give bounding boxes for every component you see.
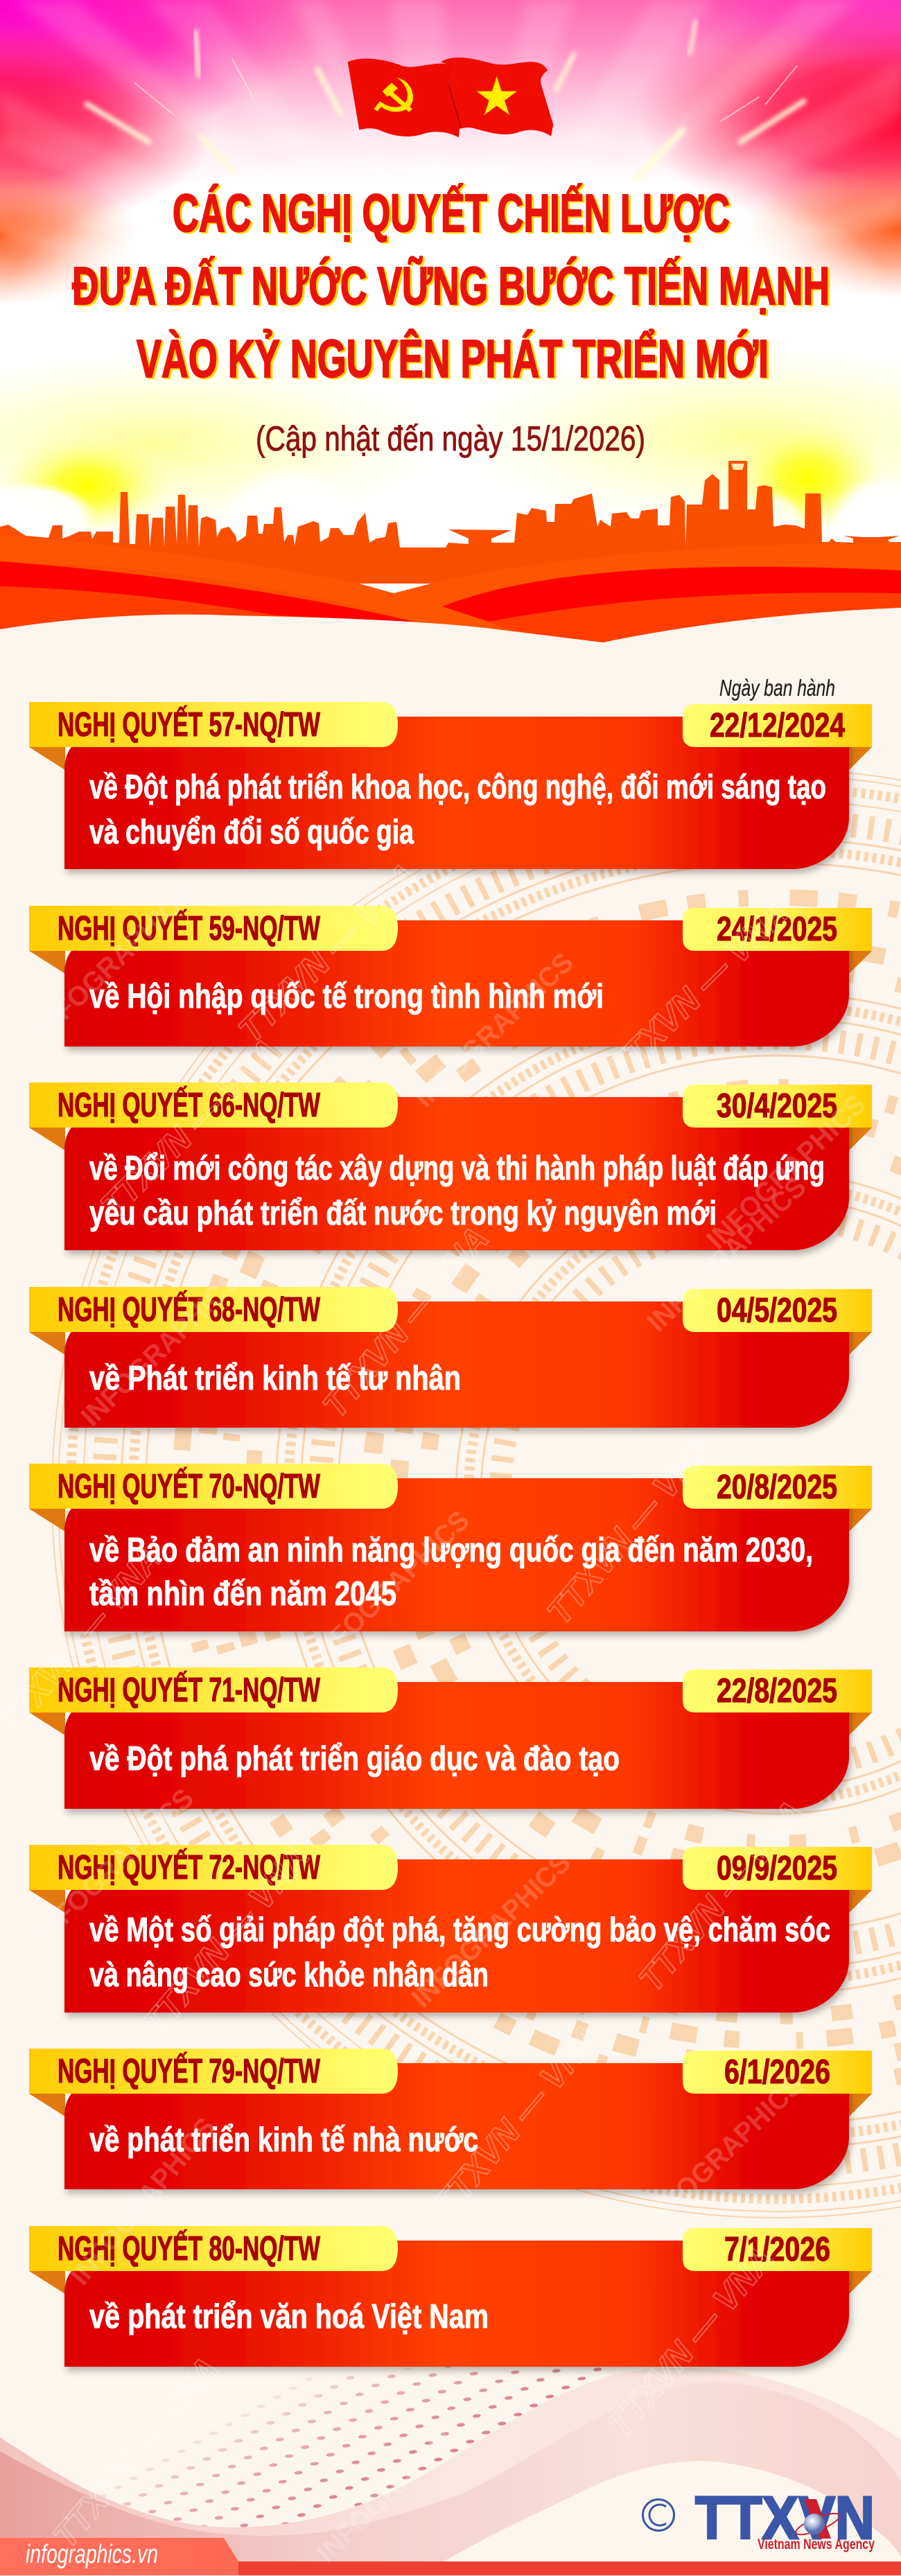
resolution 79: 6/1/2026 — [724, 2053, 830, 2091]
diagonal watermarks: TTXVN — VNA — [540, 1426, 721, 1631]
title — [72, 183, 830, 389]
diagonal watermarks: INFOGRAPHICS — [64, 2112, 222, 2291]
subtitle: update date: (Cập nhật đến ngày 15/1/2026) — [256, 419, 645, 458]
resolution 80 — [29, 2226, 872, 2367]
resolution 71 — [29, 1667, 872, 1809]
diagonal watermarks: TTXVN — VNA — [46, 2350, 227, 2555]
resolution 72 — [29, 1845, 872, 2013]
icon: party and national flags — [348, 58, 553, 137]
resolution 80: về phát triển văn hoá Việt Nam — [89, 2298, 489, 2336]
diagonal watermarks: INFOGRAPHICS — [406, 1847, 577, 2013]
resolution 71: 22/8/2025 — [717, 1672, 837, 1710]
icon: copyright mark — [643, 2499, 674, 2531]
diagonal watermarks: INFOGRAPHICS — [305, 1505, 475, 1671]
resolution 57: NGHỊ QUYẾT 57-NQ/TW — [58, 706, 321, 744]
drum watermark pattern — [52, 769, 901, 2218]
resolution 66: 30/4/2025 — [717, 1087, 837, 1125]
resolution 70: NGHỊ QUYẾT 70-NQ/TW — [58, 1468, 321, 1505]
resolution 68 — [29, 1287, 872, 1428]
diagonal watermarks: TTXVN — VNA — [602, 893, 796, 1087]
resolution 66 — [29, 1083, 872, 1250]
header sunburst background — [0, 0, 901, 624]
resolution 57 — [29, 702, 872, 869]
diagonal watermarks: INFOGRAPHICS — [76, 1265, 246, 1432]
resolution 70: tầm nhìn đến năm 2045 — [89, 1575, 396, 1613]
resolution 70 — [29, 1464, 872, 1631]
resolution 79: NGHỊ QUYẾT 79-NQ/TW — [58, 2053, 321, 2090]
resolution 72: NGHỊ QUYẾT 72-NQ/TW — [58, 1849, 321, 1886]
diagonal watermarks: INFOGRAPHICS — [311, 2402, 482, 2568]
diagonal watermarks: TTXVN — VNA — [427, 2017, 608, 2223]
resolution 68: về Phát triển kinh tế tư nhân — [89, 1360, 461, 1397]
resolution 68: NGHỊ QUYẾT 68-NQ/TW — [58, 1291, 321, 1329]
TTXVN logo: TTXVN — [695, 2485, 875, 2552]
diagonal watermarks: INFOGRAPHICS — [29, 878, 200, 1044]
diagonal watermarks — [0, 856, 872, 2568]
diagonal watermarks: TTXVN — VNA — [136, 1837, 317, 2042]
diagonal watermarks: TTXVN — VNA — [93, 1031, 287, 1225]
resolution 68: 04/5/2025 — [717, 1292, 837, 1329]
diagonal watermarks: INFOGRAPHICS — [409, 947, 579, 1113]
resolution 59: NGHỊ QUYẾT 59-NQ/TW — [58, 910, 321, 947]
city skyline and ribbons — [0, 461, 901, 693]
diagonal watermarks: INFOGRAPHICS — [642, 1171, 812, 1338]
diagonal watermarks: TTXVN — VNA — [231, 856, 425, 1050]
resolution 72: và nâng cao sức khỏe nhân dân — [89, 1956, 489, 1994]
resolution 59 — [29, 906, 872, 1046]
footer source url: infographics.vn — [26, 2540, 158, 2569]
resolution 71: về Đột phá phát triển giáo dục và đào tạo — [89, 1740, 620, 1778]
diagonal watermarks: TTXVN — VNA — [631, 1794, 812, 1999]
firework sparks — [87, 21, 804, 179]
resolution 57: 22/12/2024 — [710, 707, 845, 744]
resolution 59: về Hội nhập quốc tế trong tình hình mới — [89, 978, 604, 1015]
resolution 72: 09/9/2025 — [717, 1850, 837, 1887]
resolution 79 — [29, 2049, 872, 2189]
resolution 66: NGHỊ QUYẾT 66-NQ/TW — [58, 1087, 321, 1124]
column caption: issue date: Ngày ban hành — [719, 675, 835, 701]
resolution 57: và chuyển đổi số quốc gia — [89, 814, 414, 851]
resolution 80: 7/1/2026 — [724, 2231, 830, 2268]
diagonal watermarks: INFOGRAPHICS — [638, 2069, 809, 2236]
resolution 80: NGHỊ QUYẾT 80-NQ/TW — [58, 2230, 321, 2268]
diagonal watermarks: INFOGRAPHICS — [29, 1782, 200, 1949]
resolution 79: về phát triển kinh tế nhà nước — [89, 2121, 478, 2159]
resolution 66: yêu cầu phát triển đất nước trong kỷ nguyên mới — [89, 1195, 717, 1232]
diagonal watermarks: INFOGRAPHICS — [701, 1089, 872, 1255]
resolution 70: 20/8/2025 — [717, 1469, 837, 1506]
resolution 71: NGHỊ QUYẾT 71-NQ/TW — [58, 1672, 321, 1709]
diagonal watermarks: TTXVN — VNA — [600, 2239, 781, 2444]
resolution 59: 24/1/2025 — [717, 911, 837, 948]
footer waves and dots — [0, 2367, 901, 2576]
diagonal watermarks: TTXVN — VNA — [315, 1220, 496, 1425]
